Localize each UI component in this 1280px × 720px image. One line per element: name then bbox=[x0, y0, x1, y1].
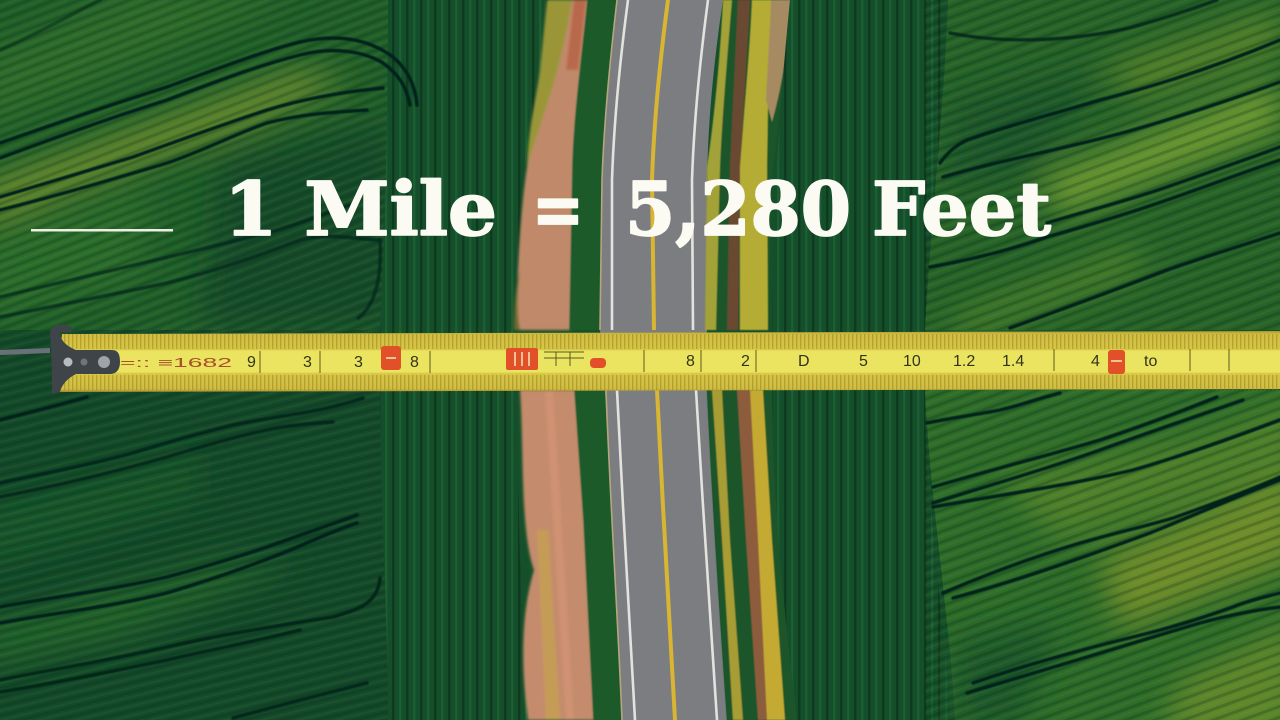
road outer shoulder line bbox=[600, 0, 622, 720]
tape numbers: 8 bbox=[410, 354, 419, 371]
tape numbers: 1.4 bbox=[1002, 353, 1024, 370]
tape measure bbox=[56, 331, 1280, 392]
right field upper tracks bbox=[950, 0, 1217, 40]
hook rivets bbox=[64, 358, 72, 366]
title: Feet bbox=[872, 167, 1051, 253]
tape numbers: 9 bbox=[247, 354, 256, 371]
road bbox=[600, 0, 727, 720]
road asphalt bbox=[600, 0, 727, 720]
panel: left inner vertical crop rows bbox=[380, 0, 550, 720]
title bbox=[224, 167, 1051, 253]
hook cable bbox=[0, 348, 50, 355]
title: = bbox=[532, 167, 584, 253]
panel: right crop field bbox=[925, 0, 1280, 720]
panel: dirt verge left of road bbox=[514, 0, 594, 720]
left field upper tracks bbox=[0, 38, 417, 143]
tape numbers: 1.2 bbox=[953, 353, 975, 370]
tape numbers: to bbox=[1144, 353, 1157, 370]
left field olive band bbox=[0, 70, 350, 225]
tape numbers: 2 bbox=[741, 353, 750, 370]
tape hook bbox=[0, 325, 120, 394]
road centre yellow line bbox=[652, 0, 675, 720]
panel: planted verge right of road bbox=[705, 0, 798, 720]
tape body bbox=[56, 331, 1280, 392]
tape numbers: D bbox=[798, 353, 810, 370]
tape numbers bbox=[120, 353, 1157, 371]
title rule bbox=[31, 229, 173, 232]
tape upper tick band bbox=[62, 334, 1280, 349]
right field lower tracks bbox=[927, 393, 1060, 423]
tape numbers: 3 bbox=[303, 354, 312, 371]
tape numbers: 4 bbox=[1091, 353, 1100, 370]
tape red marker glyphs bbox=[386, 352, 1122, 366]
right field olive band bbox=[1040, 80, 1280, 215]
left field lower tracks bbox=[0, 397, 87, 420]
road left edge line bbox=[612, 0, 635, 720]
tape numbers: 3 bbox=[354, 354, 363, 371]
panel: left crop field bbox=[0, 0, 400, 720]
tape numbers: =:: ≡1682 bbox=[120, 355, 232, 370]
title: 5,280 bbox=[625, 167, 851, 253]
hook bracket bbox=[50, 325, 120, 394]
tape numbers: 8 bbox=[686, 353, 695, 370]
road right edge line bbox=[692, 0, 717, 720]
tape red markers bbox=[381, 346, 1125, 374]
tape fine print bracket bbox=[544, 352, 584, 366]
tape major tick marks bbox=[260, 349, 1229, 373]
tape lower tick band bbox=[62, 375, 1280, 390]
tape numbers: 10 bbox=[903, 353, 921, 370]
panel: green strip left of road bbox=[570, 0, 622, 720]
tape numbers: 5 bbox=[859, 353, 868, 370]
title: 1 Mile bbox=[224, 167, 497, 253]
panel: right inner vertical crop rows bbox=[772, 0, 950, 720]
